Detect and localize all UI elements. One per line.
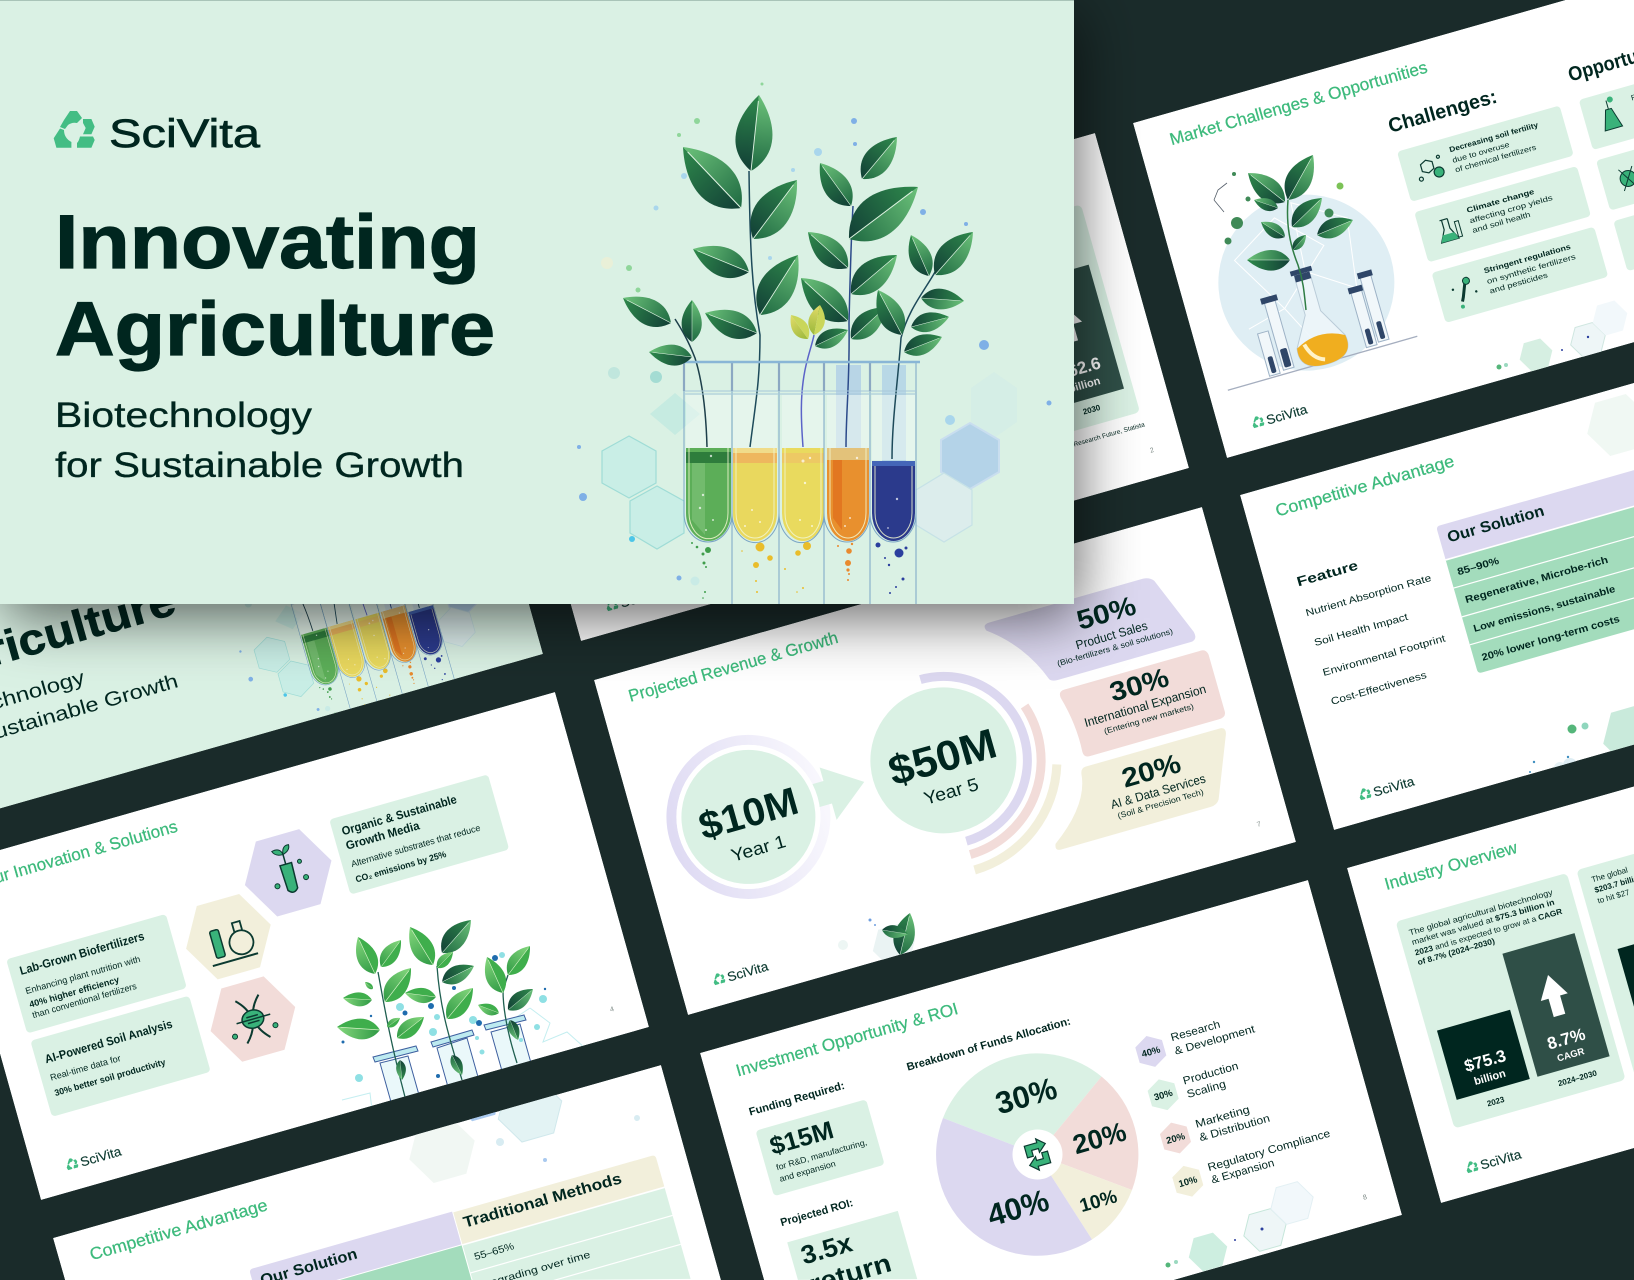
logo	[54, 111, 261, 156]
logo	[66, 1149, 122, 1170]
card: decreasing soil fertility: of chemical fertilizers	[1454, 143, 1538, 174]
bar: 2023: $75.3	[1462, 1046, 1508, 1076]
segment: ai and data services	[1056, 728, 1226, 850]
segment: ai and data services: AI & Data Services	[1109, 772, 1207, 812]
revenue arcs	[919, 672, 1062, 874]
card: climate change: Climate change	[1465, 187, 1535, 215]
title: Competitive Advantage	[1273, 451, 1456, 520]
segment: international expansion	[1059, 649, 1226, 759]
year 1 circle: Year 1	[729, 831, 788, 866]
our solution column: 85–90%	[1456, 556, 1501, 578]
bar: 2023: billion	[1473, 1068, 1507, 1088]
segment: international expansion: 30%	[1106, 662, 1172, 707]
slide: tilted title copy	[0, 604, 543, 808]
segment: ai and data services: (Soil & Precision Tech)	[1117, 787, 1205, 821]
legend: research: 40%	[1140, 1044, 1162, 1060]
card: funding: $15M	[767, 1116, 837, 1161]
card: decreasing soil fertility	[1397, 105, 1574, 202]
card: market value: The global agricultural biotechnology	[1408, 888, 1554, 937]
segment: product sales: (Bio-fertilizers & soil solutions)	[1056, 627, 1174, 668]
illustration: sprout in flask	[1214, 149, 1356, 310]
legend: research: & Development	[1173, 1023, 1256, 1058]
legend: production	[1145, 1057, 1244, 1114]
feature column: Soil Health Impact	[1313, 612, 1410, 649]
slide 2: industry overview continuation: $62.6	[1057, 354, 1103, 383]
roi heading: Projected ROI:	[779, 1197, 855, 1229]
card: ai-powered soil analysis: AI-Powered Soil Analysis	[43, 1017, 174, 1066]
icon: recycle	[1023, 1137, 1052, 1172]
traditional methods column	[453, 1155, 691, 1280]
segment: international expansion: International Expansion	[1083, 682, 1208, 730]
card: climate change	[1414, 166, 1591, 262]
legend: production: 30%	[1153, 1088, 1175, 1104]
slide 2: industry overview continuation: billion	[1067, 375, 1102, 396]
legend: marketing: Marketing	[1194, 1104, 1251, 1131]
card: market value: market was valued at $75.3 billion in	[1411, 898, 1556, 947]
legend: marketing: 20%	[1165, 1131, 1187, 1147]
card: lab-grown biofertilizers: 40% higher efficiency	[28, 974, 120, 1010]
legend: regulatory: & Expansion	[1210, 1157, 1276, 1187]
card: stringent regulations	[1432, 227, 1608, 323]
legend: production: Scaling	[1186, 1078, 1227, 1101]
card: climate change: and soil health	[1471, 210, 1531, 235]
subtitle	[55, 396, 464, 485]
card: forecast: to hit $27	[1596, 888, 1631, 905]
headline	[55, 200, 495, 372]
card: ai-powered soil analysis: Real-time data for	[49, 1053, 122, 1083]
our solution column: Our Solution	[1445, 503, 1546, 546]
slide 7: projected revenue and growth	[594, 507, 1296, 1015]
logo: SciVita	[1371, 773, 1417, 799]
year 1 circle: $10M	[694, 780, 803, 849]
main title slide	[0, 0, 1074, 604]
illustration: three plants in tubes	[337, 920, 584, 1106]
decor: footer hexagons	[1496, 298, 1632, 374]
hexagon icon: sprout tube	[245, 829, 332, 916]
card: lab-grown biofertilizers	[6, 914, 187, 1033]
legend: regulatory	[1170, 1125, 1336, 1200]
card: lab-grown biofertilizers: Lab-Grown Biofertilizers	[18, 929, 146, 978]
title: Industry Overview	[1382, 838, 1520, 894]
card: lab-grown biofertilizers: than conventional fertilizers	[31, 981, 138, 1020]
card: organic growth media: Alternative substrates that reduce	[350, 823, 481, 869]
feature column	[1295, 539, 1458, 708]
logo	[1357, 773, 1417, 804]
our solution column: Low emissions, sustainable	[1472, 584, 1617, 635]
slide 4: our innovation and solutions	[0, 692, 649, 1200]
card: ai-powered soil analysis	[30, 996, 211, 1117]
title: Investment Opportunity & ROI	[734, 999, 960, 1080]
logo	[714, 964, 770, 986]
pie chart: funds allocation: 10%	[1077, 1186, 1120, 1217]
card: stringent regulations: and pesticides	[1488, 270, 1549, 296]
decor: footer leaf	[838, 913, 915, 960]
logo: SciVita	[109, 112, 261, 156]
bar: cagr: 2024–2030	[1557, 1068, 1598, 1088]
card: organic growth media: CO₂ emissions by 25%	[354, 849, 447, 884]
legend: regulatory: 10%	[1177, 1174, 1199, 1190]
card: market value	[1396, 873, 1626, 1129]
bar: cagr: 8.7%	[1545, 1025, 1587, 1053]
slide 3: market challenges and opportunities	[1133, 0, 1634, 458]
page number: 4	[609, 1006, 615, 1014]
traditional methods column: 55–65%	[473, 1241, 516, 1263]
segment: ai and data services: 20%	[1118, 748, 1184, 793]
heading: challenges: Challenges:	[1386, 86, 1500, 138]
segment: product sales: 50%	[1073, 590, 1139, 636]
slide 2: industry overview continuation: SciVita	[618, 584, 664, 610]
card: roi: 3.5x	[797, 1227, 856, 1270]
card: decreasing soil fertility: Decreasing soil fertility	[1448, 120, 1540, 154]
card: market value: 2023 and is expected to grow at a CAGR	[1414, 907, 1564, 957]
card: organic growth media: Organic & Sustainable	[340, 792, 459, 838]
pie chart: funds allocation: 30%	[991, 1071, 1061, 1121]
traditional methods column: Traditional Methods	[461, 1170, 624, 1232]
decor: hexagons and dots	[1529, 390, 1634, 774]
illustration: plants in test tubes	[577, 82, 1052, 604]
bar: 2023: 2023	[1486, 1095, 1506, 1108]
feature column: Cost-Effectiveness	[1330, 670, 1428, 708]
bar: 2023	[1437, 1010, 1534, 1116]
funding heading: Funding Required:	[748, 1080, 846, 1119]
card: stringent regulations: on synthetic fertilizers	[1486, 252, 1577, 286]
legend: research: Research	[1169, 1019, 1222, 1044]
our solution column	[1436, 469, 1634, 674]
segment: product sales	[984, 578, 1196, 680]
logo	[1464, 1146, 1524, 1177]
pie chart: funds allocation	[936, 1053, 1138, 1256]
card: market value: of 8.7% (2024–2030)	[1416, 936, 1496, 967]
headline: Innovating	[55, 200, 480, 285]
year 1 circle	[666, 735, 864, 899]
card: decreasing soil fertility: due to overuse	[1451, 140, 1510, 165]
slide 2: industry overview continuation: 2	[1149, 447, 1155, 455]
title: Projected Revenue & Growth	[626, 628, 840, 706]
legend: marketing	[1158, 1096, 1272, 1157]
legend: research	[1133, 1007, 1257, 1071]
card: funding: for R&D, manufacturing,	[775, 1137, 868, 1172]
subtitle: Biotechnology	[55, 396, 313, 435]
year 5 circle: $50M	[883, 719, 1002, 795]
our solution column: 20% lower long-term costs	[1481, 614, 1622, 664]
page number: 8	[1362, 1194, 1368, 1202]
card: lab-grown biofertilizers: Enhancing plant nutrition with	[24, 954, 141, 996]
hexagon icon: lab flasks	[186, 894, 271, 980]
bar: cagr	[1502, 933, 1614, 1093]
legend: regulatory: Regulatory Compliance	[1206, 1128, 1332, 1174]
feature column: Feature	[1295, 558, 1360, 589]
slide 2: industry overview continuation: Source: Market Research Future, Statista	[1029, 421, 1146, 461]
page number: 7	[1256, 821, 1262, 829]
card: forecast	[1576, 821, 1634, 1077]
card: ai-powered soil analysis: 30% better soil productivity	[53, 1057, 167, 1098]
title: Market Challenges & Opportunities	[1167, 58, 1429, 149]
legend: production: Production	[1182, 1060, 1240, 1087]
card: opportunity 1	[1580, 84, 1634, 149]
feature column: Environmental Footprint	[1322, 633, 1447, 679]
logo: SciVita	[725, 958, 771, 984]
card: funding: and expansion	[778, 1158, 837, 1184]
card: roi	[787, 1211, 917, 1280]
slide: industry overview	[1347, 695, 1634, 1203]
logo: SciVita	[1264, 401, 1310, 427]
segment: product sales: Product Sales	[1074, 619, 1149, 652]
our solution column: Regenerative, Microbe-rich	[1464, 555, 1609, 606]
legend: marketing: & Distribution	[1198, 1113, 1271, 1144]
feature column: Nutrient Absorption Rate	[1305, 573, 1433, 619]
logo: SciVita	[1478, 1146, 1524, 1172]
hexagon icon: dna	[210, 976, 296, 1062]
slide 8: investment opportunity and roi	[700, 880, 1402, 1280]
pie chart: funds allocation: 40%	[983, 1183, 1053, 1233]
decor: hexagons	[401, 1071, 640, 1188]
card: stringent regulations: Stringent regulations	[1483, 242, 1572, 275]
pie heading: Breakdown of Funds Allocation:	[905, 1016, 1072, 1074]
card: opportunity 3	[1614, 215, 1634, 270]
our solution column	[249, 1212, 472, 1280]
subtitle: for Sustainable Growth	[55, 446, 464, 485]
slide 2: industry overview continuation	[570, 133, 1189, 641]
card: funding	[755, 1099, 885, 1196]
year 5 circle	[870, 687, 1016, 834]
year 5 circle: Year 5	[922, 774, 981, 809]
decor: hexagon cluster	[1166, 1179, 1318, 1274]
segment: international expansion: (Entering new markets)	[1103, 702, 1195, 736]
pie chart: funds allocation: 20%	[1069, 1117, 1130, 1160]
illustration: globe with flask and tubes	[1218, 194, 1418, 391]
card: forecast: The global	[1590, 865, 1629, 884]
logo: SciVita	[78, 1143, 124, 1169]
title: Competitive Advantage	[87, 1195, 270, 1264]
slide 2: industry overview continuation: 2030	[1082, 403, 1102, 417]
card: organic growth media: Growth Media	[344, 818, 421, 853]
card: opportunity 2	[1597, 150, 1634, 210]
logo	[1252, 407, 1308, 428]
card: climate change: affecting crop yields	[1468, 193, 1554, 225]
bar: cagr: CAGR	[1556, 1046, 1586, 1064]
slide: competitive advantage right	[1240, 383, 1634, 830]
card: organic growth media	[329, 774, 509, 895]
slide: competitive advantage bottom	[53, 1065, 721, 1280]
headline: Agriculture	[55, 287, 495, 372]
